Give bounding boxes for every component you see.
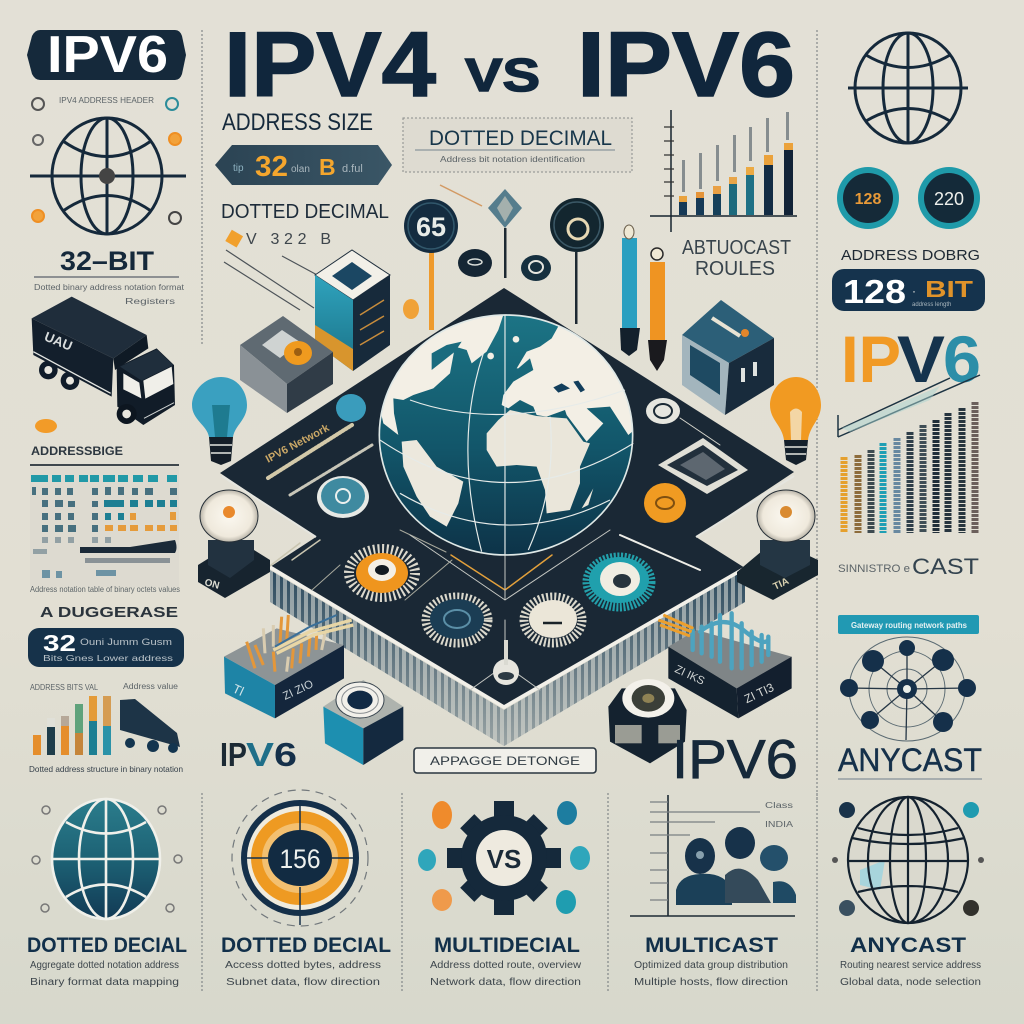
icon: truck xyxy=(32,297,175,425)
description: Network data, flow direction xyxy=(430,977,581,988)
land: polar cap and North America xyxy=(377,310,505,435)
description xyxy=(634,960,788,988)
panel: bottom 3 gear xyxy=(418,801,590,988)
badge: 32 B xyxy=(215,145,392,185)
description xyxy=(840,960,981,988)
icon: orange bulb xyxy=(770,377,821,465)
chart caption: ABTUOCAST xyxy=(682,237,791,259)
icon: wire globe xyxy=(848,797,968,923)
text: IPV6 lower right: IPV6 xyxy=(672,728,798,790)
text: address dobrg: ADDRESS DOBRG xyxy=(841,247,980,264)
text: address size: ADDRESS SIZE xyxy=(222,109,373,136)
title: IPV6 coloured xyxy=(841,322,981,396)
continents xyxy=(377,310,640,527)
box: gray xyxy=(240,316,333,413)
corner post right xyxy=(737,490,818,600)
panel: left 32-bit globe xyxy=(30,96,186,306)
icon: people group xyxy=(676,827,796,905)
badge: 128-BIT: address length xyxy=(912,302,951,308)
description: Binary format data mapping xyxy=(30,977,179,988)
icon: pin 65 xyxy=(404,199,458,330)
text: dotted decimal left: V 322 B xyxy=(246,231,331,248)
garbled lines: Dotted binary address notation format xyxy=(34,283,185,292)
chart: striped bars xyxy=(838,375,980,533)
description xyxy=(430,960,582,988)
icon: orange mini tag xyxy=(403,299,419,319)
icon: orange tag xyxy=(35,419,57,433)
badge: 32 B: 32 xyxy=(255,151,288,183)
icon: gear VS: VS xyxy=(487,844,521,874)
panel: bottom 5 anycast xyxy=(832,797,984,988)
description: Multiple hosts, flow direction xyxy=(634,977,788,988)
platform fringe xyxy=(270,570,745,746)
icon: gear VS xyxy=(447,801,561,915)
panel: bottom 1 dotted decimal xyxy=(27,799,187,988)
heading: MULTIDECIAL xyxy=(434,934,580,957)
title: VS xyxy=(465,49,540,101)
pin: bottom xyxy=(493,640,519,685)
heading: MULTICAST xyxy=(645,934,778,957)
button: orange xyxy=(644,483,686,523)
badge: 32 B: olan xyxy=(291,164,310,175)
box: right upper xyxy=(682,300,774,415)
garbled heading: ADDRESSBIGE xyxy=(31,444,123,458)
text: anycast right: ANYCAST xyxy=(838,742,982,778)
icon: pin 65: 65 xyxy=(416,212,446,242)
button: cream small xyxy=(646,398,680,424)
bar chart: top right: ROULES xyxy=(695,258,775,280)
description xyxy=(30,960,179,988)
bar chart: left lower xyxy=(29,682,183,774)
icon: disc 128: 128 xyxy=(855,191,881,208)
badge: 128-BIT xyxy=(832,269,985,311)
box: lower left: ZI ZIO xyxy=(281,678,316,703)
bar chart: left lower: ADDRESS BITS VAL xyxy=(30,683,98,692)
text: cast label: CAST xyxy=(912,554,979,579)
label: 32-BIT: 32–BIT xyxy=(60,246,155,276)
isometric platform xyxy=(220,288,794,707)
box: lower right: ZI IKS xyxy=(673,664,707,688)
panel: dotted decimal centre: Address bit notation identification xyxy=(440,155,585,164)
icon: solid globe xyxy=(52,799,160,919)
panel: left address table xyxy=(30,419,180,621)
box: lower right xyxy=(658,613,792,718)
badge: 32: 32 xyxy=(43,630,76,656)
text: dotted decimal left: DOTTED DECIMAL xyxy=(221,201,389,223)
icon: ring gauge: 156 xyxy=(280,844,320,874)
text: IPV6 lower left: IP xyxy=(220,736,247,773)
text: cast label: SINNISTRO e xyxy=(838,563,910,575)
corner post right: TIA xyxy=(772,576,791,593)
icon: small markers xyxy=(32,98,181,224)
badge: 128-BIT: 128 xyxy=(843,273,906,310)
icon: centre small markers xyxy=(440,185,551,281)
icon: teal bulb xyxy=(192,377,247,465)
platform text: IPV6 Network xyxy=(264,422,332,466)
title: IPV6 xyxy=(577,14,795,116)
garbled lines xyxy=(34,276,185,306)
box: lower left: Tl xyxy=(230,682,246,699)
icon: small truck xyxy=(120,699,180,753)
text: IPV6 lower left xyxy=(220,736,297,773)
description xyxy=(225,960,381,988)
icon: truck: UAU xyxy=(42,329,75,354)
dot islands xyxy=(487,336,519,359)
label bar: teal: Gateway routing network paths xyxy=(851,621,968,630)
text: dotted decimal left xyxy=(221,201,389,248)
badge: 32 B: B xyxy=(319,154,336,180)
bar chart: left lower: Address value xyxy=(123,682,179,691)
description: Global data, node selection xyxy=(840,977,981,988)
gear: orange xyxy=(349,549,415,597)
panel: bottom 2 ring xyxy=(221,790,391,988)
column dividers xyxy=(202,30,817,992)
icon: small marks xyxy=(32,806,182,912)
description: Routing nearest service address xyxy=(840,960,981,971)
icon: orange pen xyxy=(648,248,667,371)
icon: disc 220: 220 xyxy=(934,189,964,209)
heading: ANYCAST xyxy=(850,934,966,957)
gear: navy xyxy=(426,597,488,643)
panel: dotted decimal centre xyxy=(403,118,632,172)
garbled caption row: IPV4 ADDRESS HEADER xyxy=(59,96,154,105)
garbled heading: A DUGGERASE xyxy=(40,604,178,621)
globe grid xyxy=(379,315,633,555)
title: IPV6 coloured: IP xyxy=(841,322,901,396)
sea: inland seas xyxy=(553,381,585,393)
heading: DOTTED DECIAL xyxy=(27,934,187,957)
icon: pin right xyxy=(550,198,604,324)
badge: 32: Bits Gnes Lower address xyxy=(43,654,173,663)
chart: axis: Class xyxy=(765,801,793,810)
chip xyxy=(658,438,748,494)
table: Address notation table of binary octets values xyxy=(30,585,180,594)
badge: 32 B: tip xyxy=(233,163,244,174)
description: Subnet data, flow direction xyxy=(226,977,380,988)
land: Madagascar xyxy=(582,488,593,508)
badge: 128-BIT: BIT xyxy=(925,276,973,302)
icon: teal pen xyxy=(620,225,640,356)
title: IPV4 xyxy=(224,14,436,116)
sea: northern inlet xyxy=(432,342,462,370)
label pill: APPAGGE DETONGE xyxy=(430,754,580,768)
gear: cream xyxy=(524,597,582,643)
corner post left: ON xyxy=(203,577,221,592)
text: cast label xyxy=(838,554,979,579)
button: teal small xyxy=(336,394,366,422)
bar chart: top right xyxy=(650,110,797,280)
badge: 32: Ouni Jumm Gusm xyxy=(80,637,172,647)
land: South America xyxy=(402,440,463,527)
chart: axis: INDIA xyxy=(765,820,794,829)
isometric boxes behind platform xyxy=(240,250,774,415)
description: Access dotted bytes, address xyxy=(225,960,381,971)
icon: disc 128 xyxy=(837,167,899,229)
garbled lines: Registers xyxy=(125,297,175,306)
land: Africa xyxy=(487,410,590,513)
description: Aggregate dotted notation address xyxy=(30,960,179,971)
gear: teal xyxy=(587,557,651,607)
box: teal tall xyxy=(315,250,390,371)
land: Eurasia xyxy=(502,323,640,442)
description: Optimized data group distribution xyxy=(634,960,788,971)
globe wireframe xyxy=(30,118,186,234)
text: IPV6 lower left: 6 xyxy=(274,736,297,773)
panel: dotted decimal centre: DOTTED DECIMAL xyxy=(429,127,612,150)
badge: 32 B: d.ful xyxy=(342,163,363,175)
icon: disc 220 xyxy=(918,167,980,229)
box: lower left xyxy=(224,615,353,718)
box: lower right: ZI TI3 xyxy=(742,680,776,706)
chart: axis xyxy=(630,795,795,916)
globe xyxy=(377,310,640,555)
heading: DOTTED DECIAL xyxy=(221,934,391,957)
title: IPV6 coloured: V xyxy=(897,322,945,396)
button: teal large xyxy=(317,476,369,518)
text: IPV6 lower left: V xyxy=(246,736,274,773)
icon: satellite nodes xyxy=(418,801,590,914)
badge: 128-BIT: · xyxy=(912,284,916,298)
box: small with lens xyxy=(608,679,687,763)
description: Address dotted route, overview xyxy=(430,960,582,971)
icon: corner nodes xyxy=(832,802,984,916)
network diagram xyxy=(840,637,976,741)
label bar: teal xyxy=(838,615,979,634)
panel: bottom 4 multicast xyxy=(630,795,796,988)
panel: top right globe xyxy=(848,33,968,143)
badge: IPV6 top left: IPV6 xyxy=(47,26,168,84)
box: small teal xyxy=(323,680,403,765)
corner post left xyxy=(198,490,270,598)
bar chart: left lower: Dotted address structure in binary notation xyxy=(29,764,183,774)
table xyxy=(30,464,180,594)
label pill xyxy=(414,748,596,773)
decorative lines: left connector xyxy=(224,250,345,310)
title xyxy=(224,14,795,116)
badge: 32 xyxy=(28,628,184,667)
icon: ring gauge xyxy=(232,790,368,926)
title: IPV6 coloured: 6 xyxy=(943,322,981,396)
